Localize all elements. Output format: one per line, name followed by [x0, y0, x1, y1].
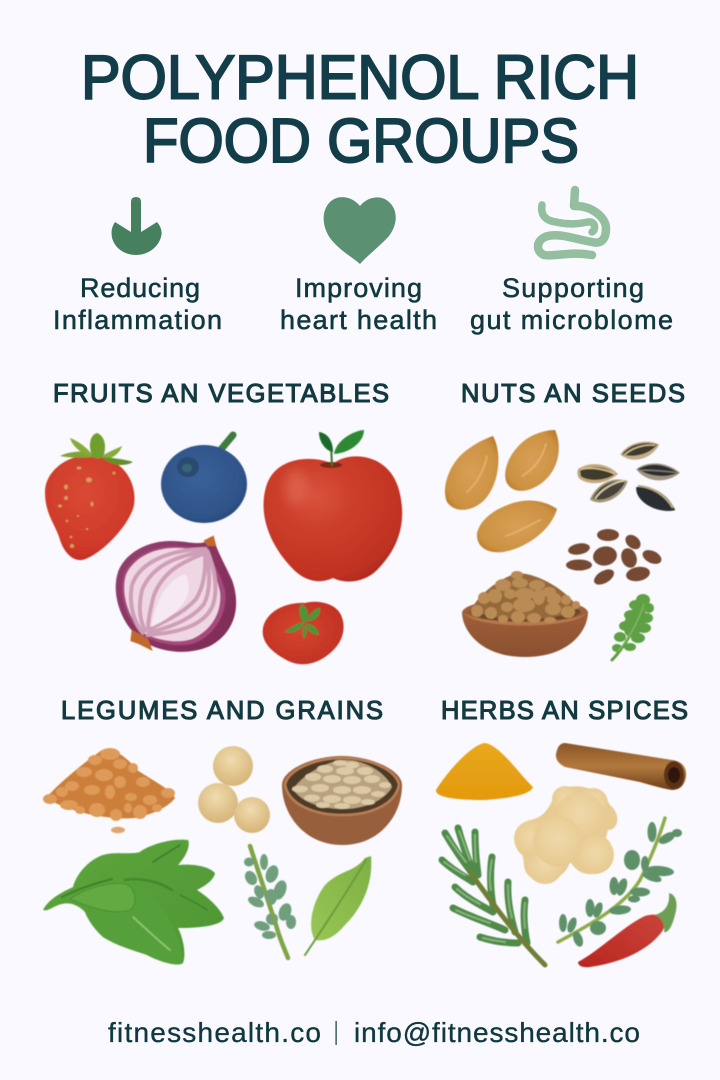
footer contact line	[108, 1017, 640, 1048]
icon: chili pepper	[578, 893, 677, 967]
title: FOOD GROUPS	[143, 107, 579, 176]
icon: strawberry	[45, 433, 134, 560]
icon: heart	[324, 197, 396, 264]
benefit: reducing inflammation	[53, 197, 222, 335]
title	[81, 44, 639, 176]
benefit label	[470, 273, 673, 335]
benefit label: gut microblome	[470, 305, 673, 335]
benefit label: Reducing	[80, 273, 200, 303]
icon: cinnamon stick	[556, 743, 686, 790]
benefit: supporting gut microbiome	[470, 190, 673, 335]
heading: nuts: NUTS AN SEEDS	[461, 380, 685, 408]
benefit label: Inflammation	[53, 305, 222, 335]
benefit label	[280, 273, 437, 335]
panel: nuts and seeds	[445, 380, 685, 660]
title: POLYPHENOL RICH	[81, 44, 639, 112]
footer contact line: info@fitnesshealth.co	[354, 1017, 640, 1048]
heading: legumes: LEGUMES AND GRAINS	[61, 697, 383, 725]
benefit: improving heart health	[280, 197, 437, 335]
icon: red onion	[116, 537, 236, 652]
icon: blueberry	[161, 435, 247, 523]
icon: turmeric powder	[436, 743, 533, 800]
icon: rosemary sprig	[442, 828, 545, 965]
benefit label	[53, 273, 222, 335]
icon: tomato	[263, 602, 344, 664]
icon: thyme sprig	[242, 846, 296, 958]
heading: herbs: HERBS AN SPICES	[441, 697, 688, 725]
icon: spinach	[43, 840, 224, 964]
benefit label: Improving	[295, 273, 422, 303]
heading: fruits: FRUITS AN VEGETABLES	[53, 380, 389, 408]
icon: bowl of ground nuts	[462, 571, 588, 657]
icon: bowl of grains	[282, 756, 402, 845]
icon: apple	[264, 430, 402, 582]
icon: sunflower seeds	[577, 439, 680, 517]
icon: almonds	[445, 430, 559, 552]
icon: down arrow	[112, 197, 162, 255]
benefit label: heart health	[280, 305, 437, 335]
icon: green leaf	[305, 856, 371, 955]
panel: legumes and grains	[43, 697, 402, 964]
icon: ginger root	[514, 786, 617, 884]
icon: lentil pile	[43, 748, 175, 833]
benefit label: Supporting	[502, 273, 644, 303]
icon: gut	[538, 190, 606, 255]
icon: brown seeds	[566, 529, 664, 588]
icon: green leaf	[612, 594, 654, 660]
icon: chickpeas	[198, 746, 270, 833]
panel: fruits and vegetables	[45, 380, 402, 664]
panel: herbs and spices	[436, 697, 688, 967]
icon: thyme sprig	[558, 818, 682, 948]
footer contact line: fitnesshealth.co	[108, 1017, 321, 1048]
